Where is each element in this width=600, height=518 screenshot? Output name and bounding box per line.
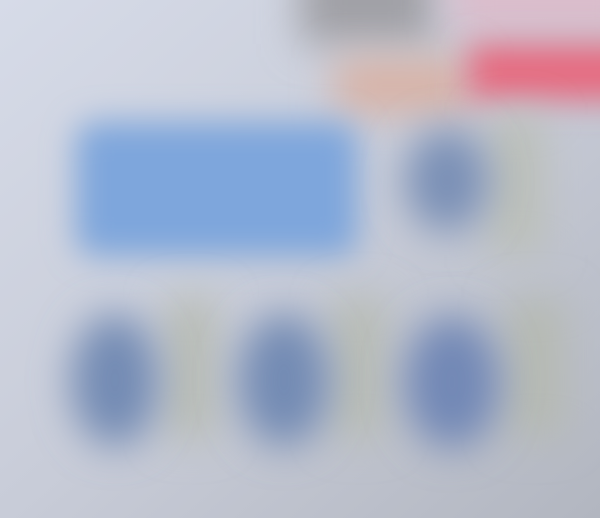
icon: top right circle	[405, 128, 489, 232]
text block: bottom left side tint	[165, 298, 217, 438]
text block: bottom middle side tint	[332, 298, 386, 438]
text block: bottom right side tint	[505, 298, 565, 438]
icon: bottom left circle	[71, 314, 159, 446]
icon: bottom middle circle	[238, 314, 330, 446]
header: pink top corner tint	[450, 0, 600, 30]
chart: bottom middle circle group	[238, 298, 386, 446]
icon: bottom right circle	[404, 316, 500, 448]
header: peach block	[335, 58, 470, 114]
chart: bottom left circle group	[71, 298, 217, 446]
text block: top right side tint	[488, 115, 544, 255]
chart: bottom right circle group	[404, 298, 565, 448]
panel: main blue panel	[76, 122, 358, 256]
header: red banner	[468, 44, 600, 100]
chart: top right circle group	[405, 115, 544, 255]
header: grey block	[300, 0, 435, 44]
